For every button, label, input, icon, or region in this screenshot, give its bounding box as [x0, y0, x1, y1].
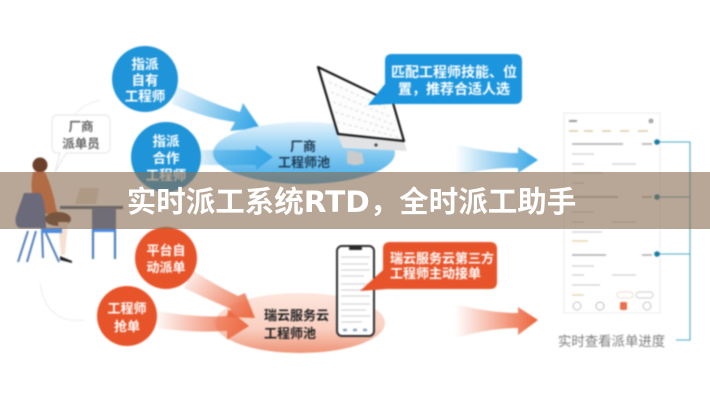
- speech bubble: third-party engineers take orders: [360, 242, 497, 291]
- label: vendor engineer pool: [278, 139, 330, 170]
- label: Ruiyun engineer pool: 瑞云服务云: [264, 308, 329, 323]
- label: vendor engineer pool: 工程师池: [278, 155, 330, 170]
- label: vendor engineer pool: 厂商: [290, 139, 316, 154]
- arrow: partner engineers to pool: [198, 145, 273, 170]
- title band: [0, 172, 710, 229]
- circle: platform auto dispatch: [135, 227, 197, 289]
- circle: assign own engineers: 自有: [132, 72, 158, 88]
- arrow: auto dispatch to pool: [184, 270, 255, 318]
- circle: assign partner engineers: 指派: [152, 133, 180, 149]
- speech bubble: third-party engineers take orders: 工程师主动接单: [390, 266, 481, 281]
- ellipse: vendor engineer pool: [213, 122, 395, 184]
- icon: smartphone: [337, 246, 374, 336]
- circle: assign partner engineers: 工程师: [146, 168, 186, 183]
- panel: order list app screen: [564, 113, 660, 313]
- circle: engineer grabs order: 工程师: [107, 301, 147, 316]
- circle: platform auto dispatch: 动派单: [146, 260, 186, 275]
- circle: engineer grabs order: [97, 286, 157, 346]
- speech bubble: match skills and location: 置，推荐合适人选: [398, 81, 510, 97]
- arrow: grab order to pool: [158, 309, 249, 340]
- circle: assign own engineers: [112, 46, 178, 112]
- speech bubble: vendor dispatcher: 厂商: [68, 119, 94, 134]
- icon: dispatcher at desk: [16, 158, 123, 263]
- label: Ruiyun engineer pool: [264, 308, 329, 341]
- title: 实时派工系统RTD，全时派工助手: [127, 179, 576, 221]
- ellipse: Ruiyun engineer pool: [215, 293, 385, 353]
- label: Ruiyun engineer pool: 工程师池: [264, 326, 316, 341]
- arrow: vendor pool to progress app: [455, 144, 538, 176]
- connector: progress callouts: [654, 139, 690, 340]
- speech bubble: match skills and location: [368, 54, 522, 105]
- speech bubble: third-party engineers take orders: 瑞云服务云第三方: [390, 251, 494, 266]
- arrow: Ruiyun pool to progress app: [455, 304, 538, 338]
- speech bubble: vendor dispatcher: 派单员: [62, 136, 100, 151]
- circle: platform auto dispatch: 平台自: [146, 243, 186, 258]
- circle: assign partner engineers: [131, 122, 201, 192]
- circle: assign own engineers: 工程师: [125, 89, 165, 104]
- arrow: own engineers to pool: [172, 86, 260, 131]
- icon: desktop monitor: [318, 67, 407, 165]
- speech bubble: match skills and location: 匹配工程师技能、位: [391, 64, 517, 80]
- faint decorative arc: [40, 100, 100, 321]
- circle: assign partner engineers: 合作: [152, 150, 180, 166]
- circle: engineer grabs order: 抢单: [114, 319, 140, 334]
- caption: view dispatch progress in real time: 实时查看派单进度: [558, 334, 665, 349]
- circle: assign own engineers: 指派: [132, 56, 159, 72]
- speech bubble: vendor dispatcher: [52, 115, 110, 172]
